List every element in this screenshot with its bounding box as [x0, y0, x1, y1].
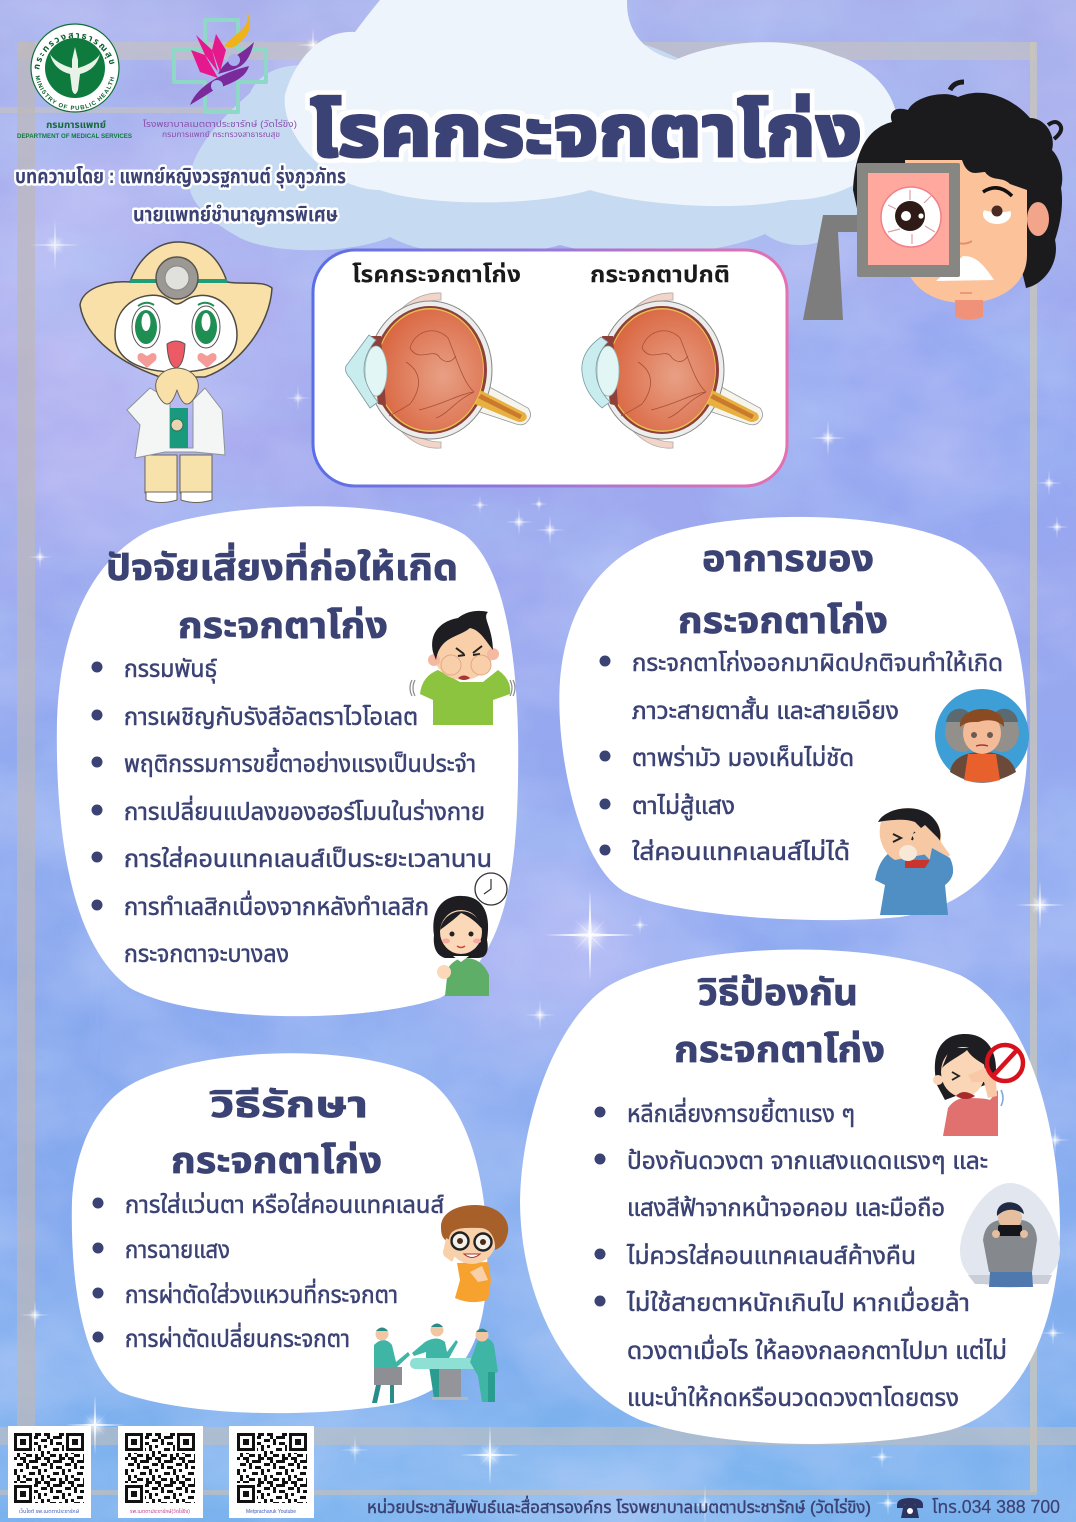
list: prevention: แนะนำให้กดหรือนวดดวงตาโดยตรง	[627, 1385, 959, 1412]
icon: telephone	[897, 1498, 923, 1518]
heading: risk factors	[106, 542, 458, 646]
illustration: boy with glasses	[441, 1205, 508, 1302]
department label: DEPARTMENT OF MEDICAL SERVICES	[17, 133, 132, 140]
logo: Ministry of Public Health: MINISTRY OF PUBLIC HEALTH	[36, 76, 114, 110]
QR code: youtube	[229, 1426, 314, 1518]
illustration: doctor mascot	[80, 242, 272, 502]
list: prevention: ป้องกันดวงตา จากแสงแดดแรงๆ และ	[627, 1148, 988, 1175]
heading: symptoms: อาการของ	[702, 538, 874, 579]
panel: risk factors	[57, 506, 518, 1016]
clouds behind title	[189, 0, 922, 256]
list: risk factors: การเปลี่ยนแปลงของฮอร์โมนในร่างกาย	[124, 795, 485, 826]
list: treatment: การใส่แว่นตา หรือใส่คอนแทคเลนส์	[125, 1191, 444, 1219]
logo: Ministry of Public Health: กระทรวงสาธารณสุข	[34, 32, 114, 70]
illustration: woman rubbing eye with no sign	[933, 1034, 1023, 1136]
icon: normal eye	[582, 293, 763, 448]
list: risk factors: การเผชิญกับรังสีอัลตราไวโอเลต	[124, 704, 418, 731]
list: symptoms: กระจกตาโก่งออกมาผิดปกติจนทำให้เกิด	[632, 649, 1003, 677]
list: treatment: การผ่าตัดใส่วงแหวนที่กระจกตา	[125, 1278, 398, 1309]
heading: prevention: วิธีป้องกัน	[697, 972, 858, 1013]
list: prevention	[594, 1097, 1007, 1412]
list: prevention: ดวงตาเมื่อไร ให้ลองกลอกตาไปมา แต่ไม่	[627, 1334, 1007, 1365]
heading: prevention: กระจกตาโก่ง	[674, 1029, 885, 1070]
list: risk factors: กรรมพันธุ์	[124, 656, 217, 684]
QR code: line: รพ.เมตตาประชารักษ์(วัดไร่ขิง)	[130, 1508, 190, 1515]
list: symptoms: ตาไม่สู้แสง	[632, 792, 735, 821]
author: นายแพทย์ชำนาญการพิเศษ	[133, 204, 338, 226]
list: symptoms	[600, 649, 1003, 866]
illustration: person using phone	[960, 1183, 1060, 1288]
hospital name: โรงพยาบาลเมตตาประชารักษ์ (วัดไร่ขิง)	[143, 119, 297, 129]
illustration: boy rubbing eyes	[410, 611, 515, 725]
list: symptoms: ใส่คอนแทคเลนส์ไม่ได้	[632, 838, 850, 866]
footer: phone number: โทร.034 388 700	[932, 1497, 1060, 1517]
heading: treatment: วิธีรักษา	[209, 1084, 368, 1125]
label: keratoconus: โรคกระจกตาโก่ง	[352, 261, 521, 287]
panel: prevention	[520, 950, 1060, 1444]
list: prevention: ไม่ควรใส่คอนแทคเลนส์ค้างคืน	[626, 1242, 916, 1270]
label: normal cornea: กระจกตาปกติ	[590, 261, 730, 287]
QR code: website: เว็บไซต์ รพ.เมตตาประชารักษ์	[19, 1508, 79, 1515]
heading: prevention	[674, 972, 885, 1070]
heading: treatment	[171, 1084, 382, 1181]
illustration: girl with clock	[433, 873, 507, 996]
heading: treatment: กระจกตาโก่ง	[171, 1140, 382, 1181]
list: risk factors	[92, 656, 492, 968]
illustration: man with eye at phoropter	[803, 82, 1062, 320]
heading: risk factors: กระจกตาโก่ง	[178, 605, 388, 646]
heading: symptoms: กระจกตาโก่ง	[678, 600, 888, 641]
list: risk factors: พฤติกรรมการขยี้ตาอย่างแรงเป็นประจำ	[124, 747, 476, 778]
QR code: line	[118, 1426, 203, 1518]
list: symptoms: ภาวะสายตาสั้น และสายเอียง	[632, 695, 899, 725]
list: risk factors: กระจกตาจะบางลง	[124, 941, 289, 968]
logo: Ministry of Public Health	[30, 23, 120, 113]
QR code: website	[8, 1426, 91, 1518]
illustration: surgeons	[372, 1324, 498, 1403]
hospital name: กรมการแพทย์ กระทรวงสาธารณสุข	[162, 130, 280, 139]
list: risk factors: การใส่คอนแทคเลนส์เป็นระยะเวลานาน	[124, 845, 492, 873]
list: risk factors: การทำเลสิกเนื่องจากหลังทำเลสิก	[124, 890, 429, 921]
department label	[17, 120, 132, 140]
list: prevention: ไม่ใช้สายตาหนักเกินไป หากเมื่อยล้า	[626, 1286, 970, 1317]
panel: treatment	[72, 1053, 508, 1413]
author: บทความโดย : แพทย์หญิงวรฐกานต์ รุ่งภูวภัทร	[15, 166, 346, 188]
author	[15, 166, 346, 226]
panel: symptoms	[559, 517, 1029, 920]
hospital name	[143, 119, 297, 139]
list: treatment	[92, 1191, 444, 1353]
footer: organization: หน่วยประชาสัมพันธ์และสื่อสารองค์กร โรงพยาบาลเมตตาประชารักษ์ (วัดไร่ขิง)	[367, 1495, 871, 1517]
department label: กรมการแพทย์	[46, 120, 106, 131]
list: symptoms: ตาพร่ามัว มองเห็นไม่ชัด	[632, 744, 854, 772]
icon: blurred vision boy	[935, 689, 1029, 783]
icon: keratoconus eye	[346, 293, 531, 448]
panel: eye comparison	[313, 250, 787, 486]
list: prevention: หลีกเลี่ยงการขยี้ตาแรง ๆ	[627, 1097, 855, 1128]
list: prevention: แสงสีฟ้าจากหน้าจอคอม และมือถือ	[627, 1195, 945, 1222]
logo: Metta Pracharak Hospital	[174, 10, 266, 112]
QR code: youtube: Metpracharuk Youtube	[246, 1509, 296, 1515]
title: โรคกระจกตาโก่ง	[310, 92, 862, 172]
heading: symptoms	[678, 538, 888, 641]
list: treatment: การฉายแสง	[125, 1237, 230, 1264]
list: treatment: การผ่าตัดเปลี่ยนกระจกตา	[125, 1322, 350, 1353]
illustration: man rubbing eye	[875, 808, 953, 915]
heading: risk factors: ปัจจัยเสี่ยงที่ก่อให้เกิด	[106, 542, 458, 588]
